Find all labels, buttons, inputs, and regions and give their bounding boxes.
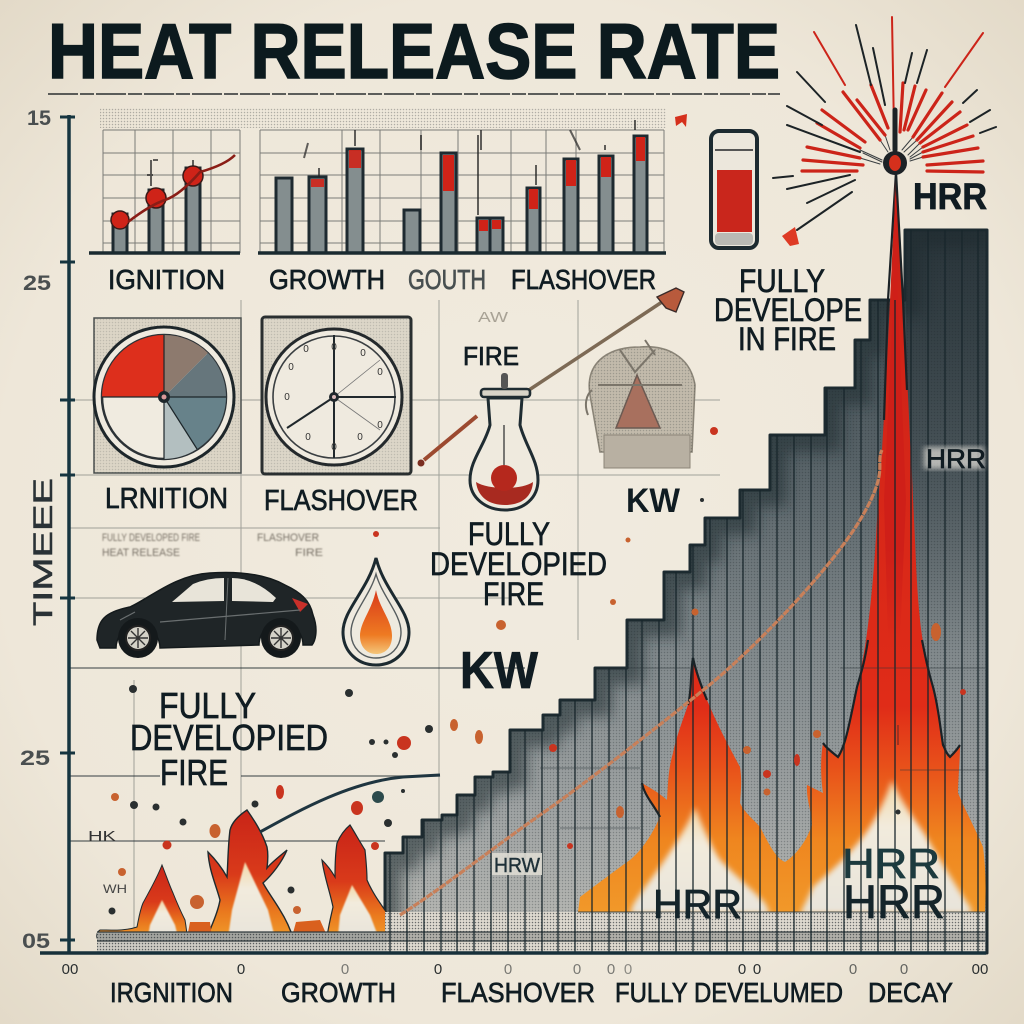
x axis stage labels: GROWTH xyxy=(281,977,396,1008)
x axis stage labels: FLASHOVER xyxy=(441,977,595,1008)
HRR labels in flames: HRR xyxy=(653,881,742,927)
HRR top label: HRR xyxy=(913,176,987,217)
rising growth curve xyxy=(260,775,440,832)
y axis tick labels xyxy=(20,107,51,953)
right flame white core xyxy=(800,780,972,914)
middle labels: LRNITION xyxy=(105,483,228,515)
x axis stage labels: FULLY DEVELUMED xyxy=(615,977,843,1008)
HRR labels in flames xyxy=(653,840,945,928)
HRR label on bars: HRR xyxy=(926,444,986,474)
red rays xyxy=(802,17,983,172)
grid lines xyxy=(70,300,720,950)
y axis title: TIMEEE xyxy=(28,478,58,626)
horizontal bar gridlines xyxy=(540,668,985,828)
icon: clock: 0 xyxy=(360,348,366,359)
y axis tick labels: 15 xyxy=(27,107,51,130)
middle labels xyxy=(105,483,418,517)
x axis stage labels: DECAY xyxy=(868,977,953,1008)
faded caption text: FULLY DEVELOPED FIRE xyxy=(102,532,200,544)
thin inner ray tips xyxy=(860,135,923,164)
faded caption text: HEAT RELEASE xyxy=(102,547,180,559)
faded caption text: FLASHOVER xyxy=(257,532,319,544)
top row labels: IGNITION xyxy=(108,264,225,295)
small flame cores xyxy=(148,900,178,937)
x axis stage labels xyxy=(110,977,953,1008)
FULLY DEVELOPED FIRE middle label: FULLY xyxy=(468,516,550,552)
title: HEAT RELEASE RATE xyxy=(48,7,780,95)
small faded labels: WH xyxy=(103,882,127,896)
big KW label: KW xyxy=(460,642,539,700)
icon: dial chart xyxy=(94,318,241,473)
x axis tick labels: 0 xyxy=(900,961,908,978)
faded label: AW xyxy=(478,309,509,326)
FIRE label: FIRE xyxy=(463,341,519,371)
x axis tick labels: 0 xyxy=(607,961,615,978)
FULLY DEVELOPE IN FIRE label: IN FIRE xyxy=(738,321,836,357)
title rule xyxy=(48,93,780,95)
x axis tick labels: 0 xyxy=(738,961,746,978)
icon: clock: 0 xyxy=(305,432,311,443)
x axis tick labels: 0 xyxy=(849,961,857,978)
x axis tick labels: 00 xyxy=(972,961,988,978)
FULLY DEVELOPED FIRE lower label: DEVELOPIED xyxy=(130,717,328,758)
FULLY DEVELOPE IN FIRE label: DEVELOPE xyxy=(714,292,862,328)
FULLY DEVELOPED FIRE lower label: FIRE xyxy=(160,752,228,793)
icon: beaker xyxy=(711,131,757,248)
faded caption text xyxy=(102,532,323,559)
KW small label: KW xyxy=(626,482,681,520)
middle labels: FLASHOVER xyxy=(264,485,418,517)
mini bars xyxy=(113,136,647,253)
rising curve xyxy=(128,155,235,222)
small ignition flames xyxy=(97,810,400,938)
stepped HRR bars xyxy=(385,230,987,953)
icon: flame drop xyxy=(343,558,409,665)
x axis tick labels: 0 xyxy=(237,961,245,978)
x axis tick labels: 0 xyxy=(573,961,581,978)
icon: radiating gauge burst xyxy=(773,17,996,230)
icon: clock: 0 xyxy=(377,420,383,431)
faded caption text: FIRE xyxy=(295,547,323,559)
y axis tick labels: 05 xyxy=(22,930,50,953)
x axis xyxy=(40,951,986,955)
FULLY DEVELOPED FIRE middle label: DEVELOPIED xyxy=(430,546,607,582)
bar column lines xyxy=(390,230,978,953)
red blob at ray end xyxy=(782,227,799,246)
top mini bar charts xyxy=(89,108,666,253)
FULLY DEVELOPED FIRE middle label xyxy=(430,516,607,612)
FULLY DEVELOPE IN FIRE label: FULLY xyxy=(739,263,825,299)
x axis tick labels: 0 xyxy=(753,961,761,978)
icon: clock: 0 xyxy=(331,342,337,353)
top row labels: GROWTH xyxy=(269,264,385,295)
x axis tick labels xyxy=(62,961,988,978)
x axis tick labels: 0 xyxy=(504,961,512,978)
small faded labels xyxy=(88,828,542,896)
icon: car xyxy=(97,572,316,658)
icon: grey sack xyxy=(586,340,695,468)
HRR labels in flames: HRR xyxy=(842,840,940,887)
red marker xyxy=(675,114,687,127)
top row labels: GOUTH xyxy=(408,264,486,295)
flame outline xyxy=(642,172,960,817)
top row labels: FLASHOVER xyxy=(511,264,656,295)
y axis tick labels: 25 xyxy=(23,272,51,295)
x axis tick labels: 0 xyxy=(624,961,632,978)
HRR labels in flames: HRR xyxy=(843,875,945,928)
red bar caps xyxy=(111,137,645,231)
bottom halftone band xyxy=(97,912,985,953)
dashed heat curve xyxy=(400,450,882,915)
large flame peak xyxy=(578,172,986,912)
rod tip xyxy=(657,288,684,312)
icon: clock: 0 xyxy=(377,367,383,378)
icon: clock: 0 xyxy=(357,432,363,443)
scattered embers xyxy=(108,427,966,914)
left mid flame core xyxy=(630,807,770,914)
icon: probe rod xyxy=(418,288,684,466)
top row labels xyxy=(108,264,656,295)
black rays xyxy=(773,25,996,230)
icon: clock: 0 xyxy=(288,362,294,373)
FULLY DEVELOPED FIRE middle label: FIRE xyxy=(483,576,544,612)
small faded labels: HRW xyxy=(494,855,540,877)
lower darker grid lines xyxy=(70,668,525,841)
FULLY DEVELOPE IN FIRE label xyxy=(714,263,862,357)
icon: clock: 0 xyxy=(303,344,309,355)
y axis tick labels: 25 xyxy=(20,747,50,770)
icon: clock: 0 xyxy=(331,442,337,453)
x axis tick labels: 00 xyxy=(62,961,78,978)
x axis stage labels: IRGNITION xyxy=(110,977,233,1008)
icon: flask xyxy=(470,373,538,510)
x axis tick labels: 0 xyxy=(341,961,349,978)
FULLY DEVELOPED FIRE lower label: FULLY xyxy=(159,685,256,726)
small faded labels: HK xyxy=(88,828,116,845)
y axis with ticks xyxy=(20,107,75,953)
FULLY DEVELOPED FIRE lower label xyxy=(130,685,328,793)
icon: clock xyxy=(262,317,411,474)
icon: clock: 0 xyxy=(284,392,290,403)
x axis tick labels: 0 xyxy=(434,961,442,978)
